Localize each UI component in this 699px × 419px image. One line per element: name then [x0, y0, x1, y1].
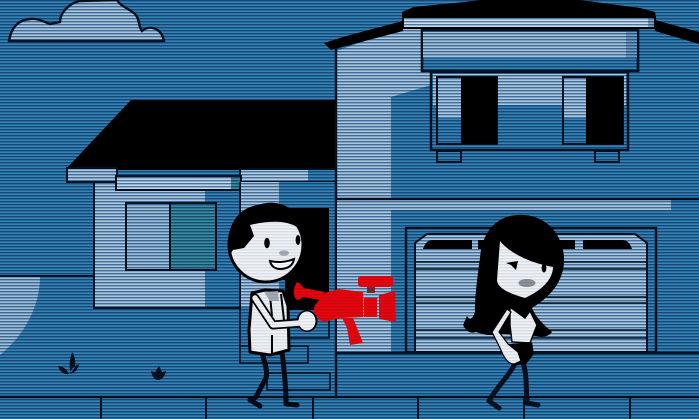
man head	[229, 208, 303, 282]
yard light patch	[0, 277, 40, 355]
left eave	[67, 168, 117, 182]
garage door	[415, 234, 647, 352]
big house light side	[337, 27, 431, 198]
woman hair	[463, 215, 564, 337]
woman legs	[489, 362, 538, 408]
man torso	[249, 290, 289, 355]
left upper window	[437, 77, 497, 144]
camera mid section	[364, 298, 377, 317]
cloud	[9, 0, 164, 41]
woman top	[510, 307, 537, 343]
woman face	[497, 241, 553, 298]
balcony window frame	[431, 72, 628, 150]
dormer roof	[402, 0, 656, 18]
plant right	[151, 366, 166, 380]
woman arm	[492, 309, 521, 364]
plants	[58, 352, 166, 380]
step lower	[267, 373, 330, 390]
step upper	[240, 346, 308, 363]
man eyes	[264, 235, 300, 248]
plant left	[58, 352, 79, 374]
man legs	[250, 352, 297, 406]
camera grip	[342, 318, 363, 345]
dormer box	[422, 30, 638, 71]
small house	[67, 100, 337, 390]
right eave	[240, 169, 336, 182]
small house window	[126, 203, 216, 270]
door	[272, 208, 329, 310]
small house wall	[94, 182, 241, 308]
right upper window	[563, 77, 623, 144]
man mouth	[270, 259, 294, 269]
woman mouth	[518, 279, 536, 287]
left foot	[437, 151, 461, 162]
camera body	[313, 289, 363, 322]
centre fascia	[116, 176, 241, 190]
big house left edge	[335, 48, 337, 397]
small house roof	[67, 100, 337, 170]
woman eyes	[506, 261, 546, 272]
pavement	[0, 397, 699, 419]
man nose	[279, 250, 289, 256]
left fence line	[0, 275, 94, 277]
big house wall	[336, 25, 699, 352]
right foot	[595, 151, 619, 162]
camera lens hood	[294, 282, 325, 300]
man collar	[264, 291, 279, 301]
garage window left	[423, 240, 472, 249]
woman	[463, 215, 564, 408]
man	[228, 203, 318, 406]
dormer fascia	[403, 17, 655, 28]
house base line	[336, 352, 699, 354]
man shirt details	[270, 294, 284, 354]
garage frame	[406, 228, 656, 352]
camera back	[379, 291, 396, 322]
garage window right	[583, 240, 632, 249]
garage window middle	[478, 240, 575, 249]
side wall with door	[240, 182, 336, 346]
man arm and hand	[255, 298, 318, 332]
main roof edge	[324, 20, 699, 50]
man hair	[228, 203, 303, 256]
door frame	[290, 300, 329, 338]
woman waist	[500, 342, 534, 366]
camera top handle	[358, 276, 393, 287]
floor band	[336, 199, 699, 352]
big house	[324, 0, 699, 397]
camera connector	[367, 287, 375, 293]
red video camera	[294, 276, 396, 345]
